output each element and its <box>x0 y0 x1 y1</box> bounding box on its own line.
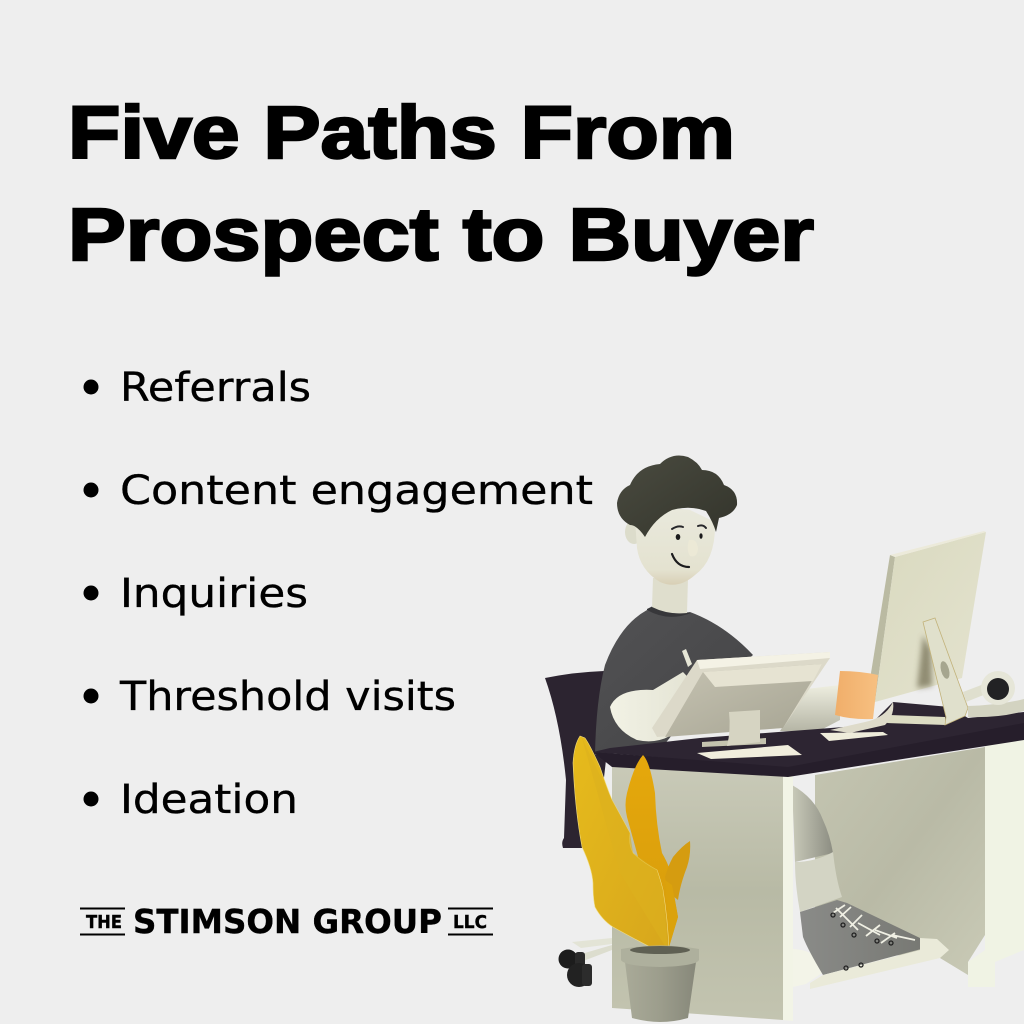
tablet <box>652 652 830 737</box>
chair base and wheels <box>558 938 612 987</box>
logo: The Stimson Group LLC: STIMSON GROUP <box>133 902 442 941</box>
ear <box>625 520 643 544</box>
illustration: person at desk <box>545 456 1024 1022</box>
neck <box>652 578 688 613</box>
headphones <box>963 671 1024 717</box>
leg and sock <box>792 785 842 912</box>
desk front panel <box>612 764 783 1020</box>
logo: The Stimson Group LLC: THE <box>86 912 122 933</box>
paper curl <box>830 702 893 733</box>
item: Ideation: Ideation <box>120 777 298 823</box>
title <box>68 91 814 276</box>
paper on desk <box>697 745 802 759</box>
item: Threshold visits: Threshold visits <box>119 674 456 720</box>
leaf: back <box>626 755 678 947</box>
hair <box>617 456 737 537</box>
title: Prospect to Buyer <box>68 193 814 276</box>
leaf: front <box>573 736 669 952</box>
monitor <box>871 531 986 702</box>
item: Inquiries: Inquiries <box>120 571 308 617</box>
far arm <box>780 685 840 732</box>
title: Five Paths From <box>68 91 735 174</box>
facial features <box>672 525 706 567</box>
stylus <box>682 649 692 667</box>
bullet list <box>84 365 593 823</box>
monitor stand <box>887 618 968 725</box>
leaf: lower stem <box>665 880 678 947</box>
coffee cup <box>835 671 878 719</box>
near arm <box>610 672 700 741</box>
tablet stand <box>702 710 766 747</box>
desk front panel edge <box>783 775 793 1021</box>
office chair back <box>545 671 606 848</box>
collar <box>647 606 691 617</box>
sneaker <box>800 900 949 989</box>
desk back panel <box>815 747 985 975</box>
plant <box>573 736 690 952</box>
item: Referrals: Referrals <box>120 365 311 411</box>
far shoe <box>793 949 822 987</box>
logo: The Stimson Group LLC: LLC <box>453 912 487 933</box>
paper near cup <box>820 732 888 741</box>
item: Content engagement: Content engagement <box>120 468 593 514</box>
desk top <box>593 702 1024 777</box>
face <box>635 509 715 585</box>
desk right side panel <box>968 738 1024 987</box>
leaf fold <box>582 738 668 951</box>
flower pot <box>621 946 699 1022</box>
leaf: right <box>665 841 690 900</box>
person torso <box>595 610 753 755</box>
